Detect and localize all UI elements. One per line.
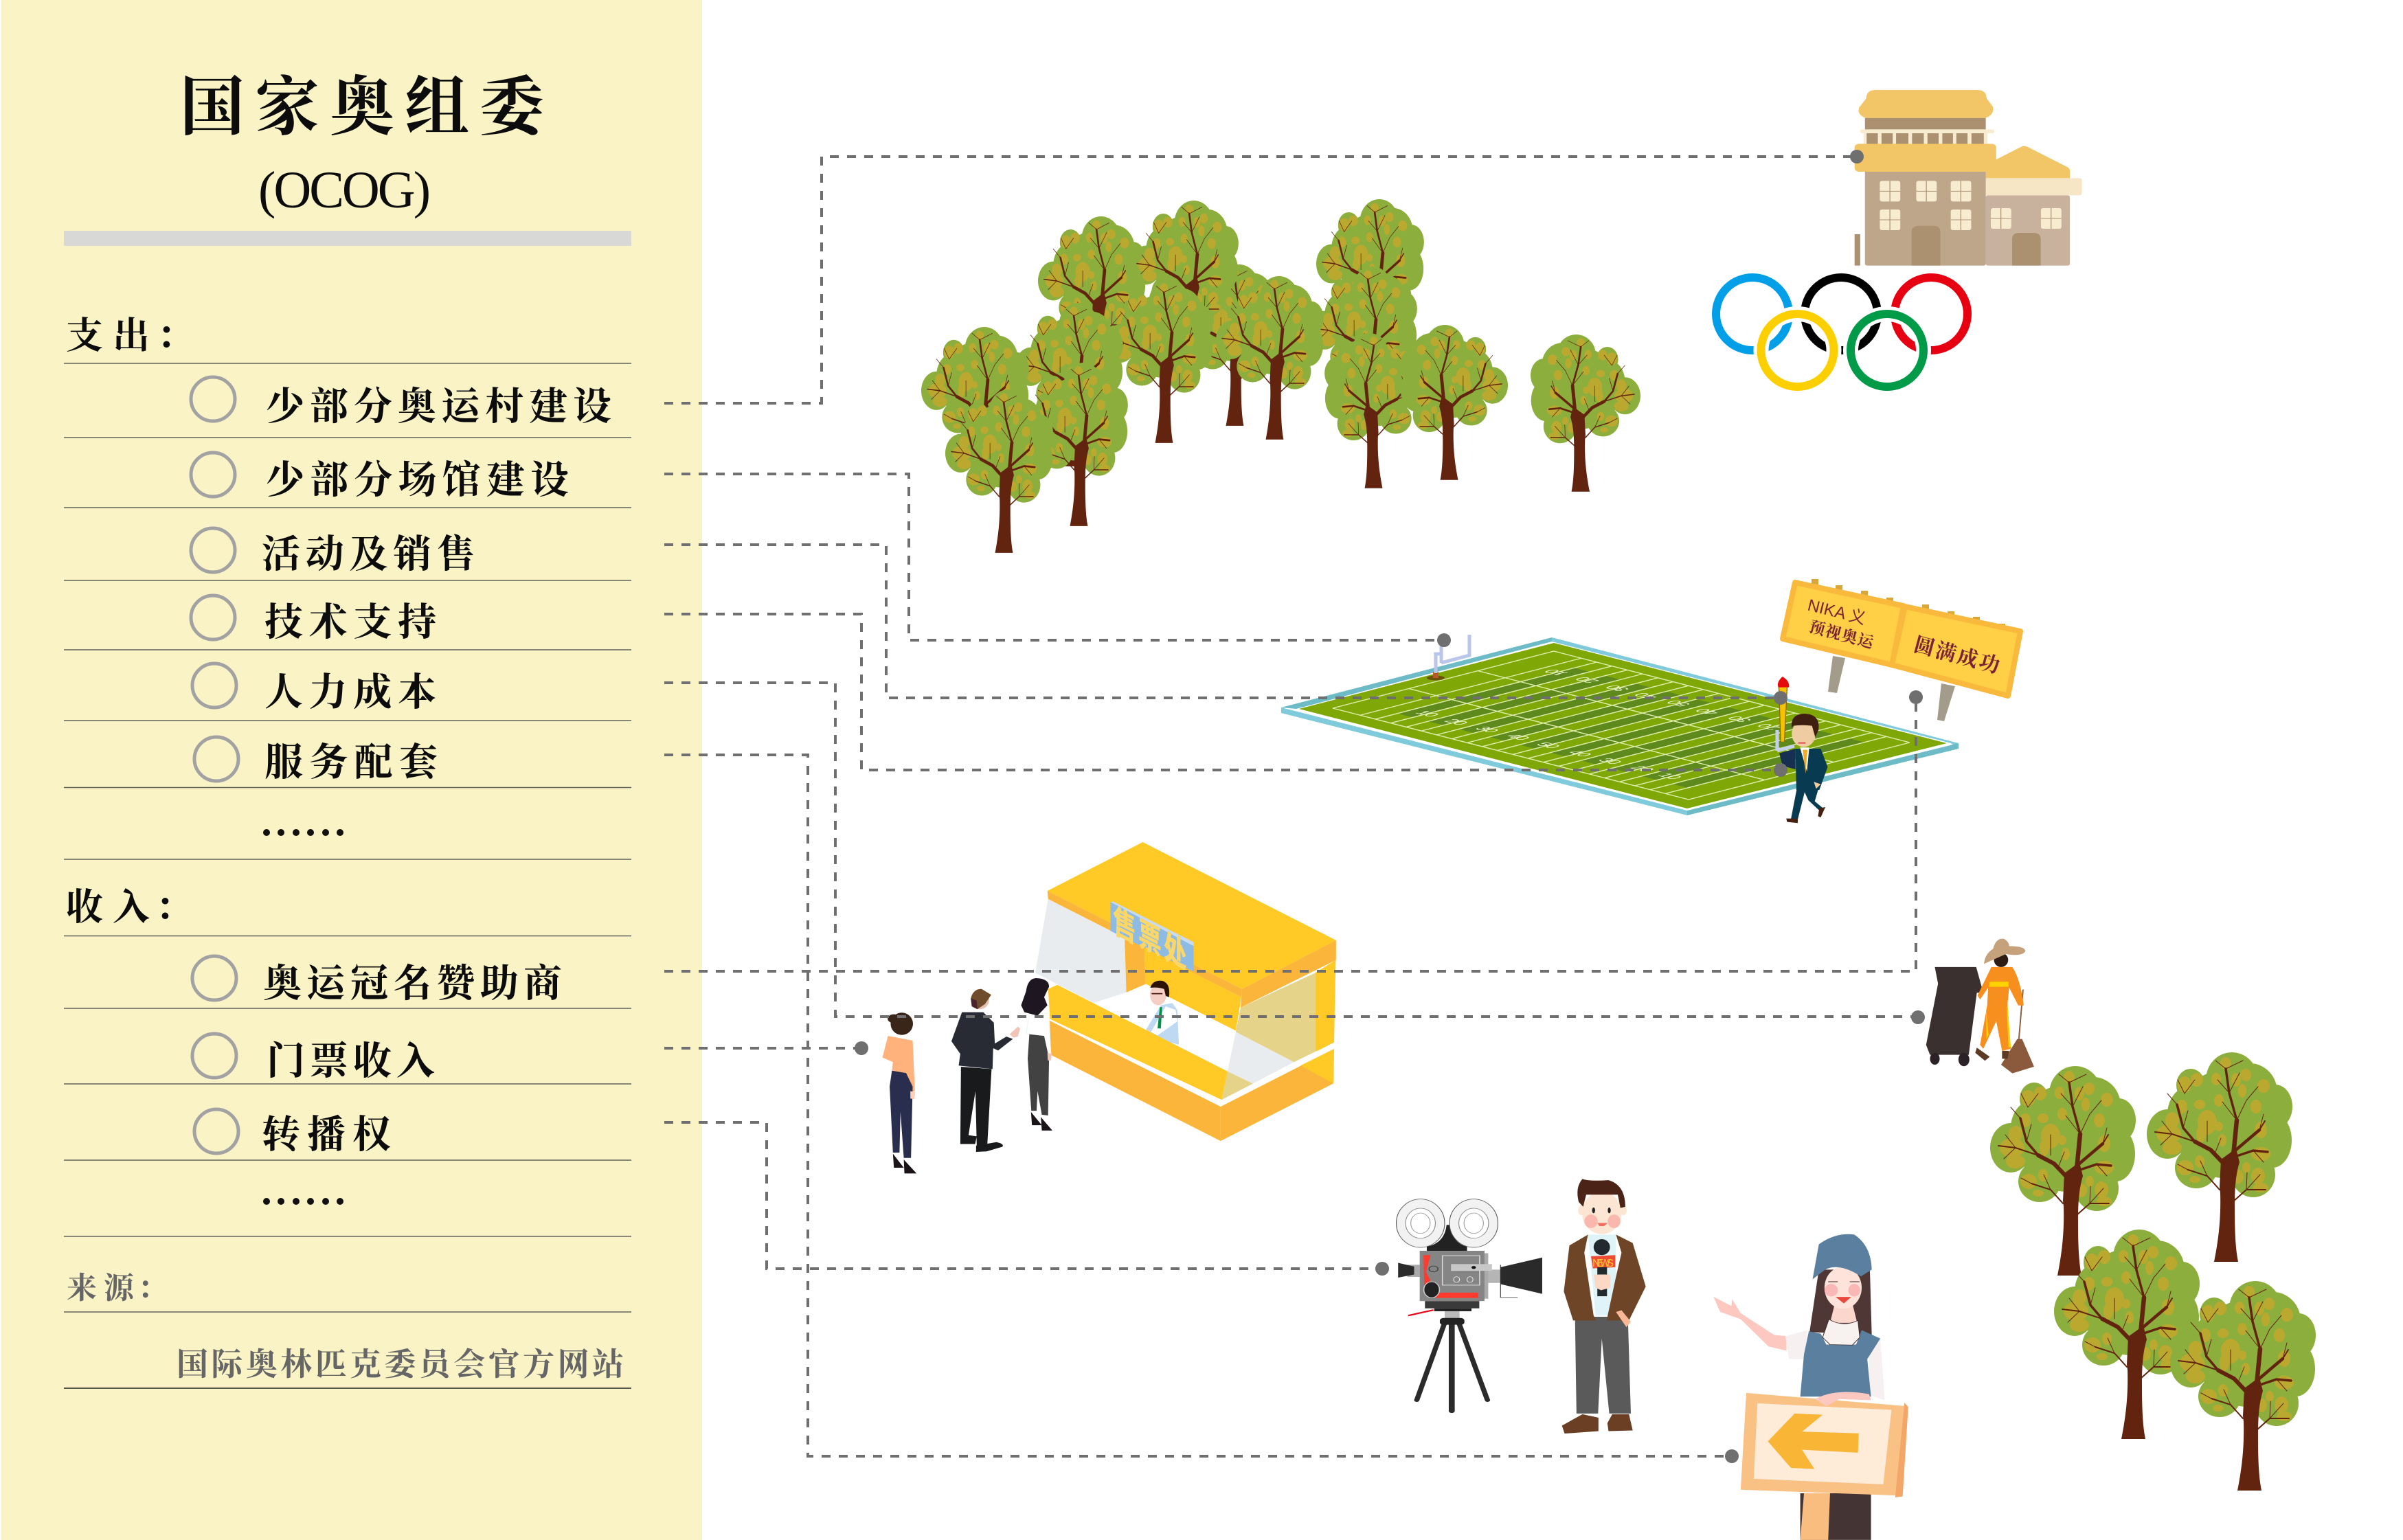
yard numbers upper: 50 [1662,699,1695,707]
pole and legs [1801,1493,1871,1540]
yard numbers lower: 30 [1471,725,1504,734]
ruled lines [64,363,631,1388]
neckline [1823,1320,1860,1345]
janitor with bin [1926,939,2034,1074]
lens [1485,1258,1542,1298]
cap [1812,1234,1872,1279]
yard numbers lower: 50 [1532,741,1565,749]
post left [1828,656,1845,693]
income items: 门票收入 [267,1041,435,1083]
torch bearer [1778,677,1827,823]
yard numbers lower: 20 [1626,765,1659,773]
goal post left [1427,635,1469,680]
connector end dots [855,150,1925,1463]
board one [1783,582,1904,665]
connector: broadcast rights [664,1122,1377,1269]
woman with arrow sign [1713,1234,1908,1540]
film reels [1397,1199,1498,1247]
yard numbers upper: 40 [1691,707,1724,716]
board text NIKA: NIKA 义 [1806,596,1868,629]
connectors [664,157,1916,1456]
tripod [1417,1311,1487,1411]
yard numbers lower: 20 [1440,718,1473,726]
worker [1975,939,2025,1061]
heading: expenditure: 支出： [66,315,194,356]
arm [1713,1297,1787,1350]
camera on tripod [1397,1199,1542,1411]
yard numbers lower: 10 [1411,710,1444,718]
sign board [1741,1393,1908,1496]
clerk [1138,981,1179,1045]
subtitle OCOG: (OCOG) [258,161,431,219]
shirt [1588,1234,1616,1315]
hair [1577,1179,1625,1208]
yard numbers upper [1539,668,1785,731]
olympic rings [1716,278,1967,387]
field turf [1299,643,1947,808]
connector: sponsors [664,704,1916,971]
expenditure items: 服务配套 [264,742,438,784]
expenditure items: 人力成本 [264,672,436,714]
building: olympic village [1855,90,2082,266]
broom [2001,990,2034,1074]
board slogan two: 圆满成功 [1911,633,2002,678]
connector: village construction [664,157,1851,403]
connector: service [664,755,1726,1456]
title divider bar [64,231,631,246]
man in suit [951,989,1020,1152]
ellipsis dots 2 [263,1198,343,1205]
income items: 转播权 [262,1114,391,1157]
connector: ticket income [664,1047,856,1050]
board two [1892,607,2020,696]
heading: income: 收入： [66,887,192,928]
yard numbers upper: 20 [1570,676,1603,684]
field lines and stripes [1333,651,1910,800]
camera body [1420,1251,1492,1311]
torch [1778,677,1789,742]
panel background [1,0,702,1540]
yard numbers lower: 10 [1654,772,1686,780]
camera top connector [1427,1225,1467,1251]
hair back [1809,1269,1872,1335]
football field [1281,635,1959,815]
neck and head [1582,1192,1621,1234]
title: 国家奥组委 [180,72,546,144]
jacket [1564,1234,1646,1320]
expenditure items: 少部分奥运村建设 [266,386,611,429]
source label: 来源： [67,1271,168,1305]
expenditure items: 活动及销售 [262,534,475,576]
connector: technical support [664,614,1776,770]
face [1825,1267,1862,1309]
yard numbers upper: 20 [1752,723,1785,731]
ticket booth [883,842,1336,1173]
yard numbers lower: 40 [1564,749,1597,758]
woman left [883,1012,916,1173]
goal post right [1777,730,1794,751]
yard numbers lower: 40 [1502,733,1535,741]
income items [262,963,562,1157]
field border [1281,637,1552,709]
dress [1801,1330,1880,1396]
NEWS flag text: NEWS [1592,1258,1614,1269]
expenditure items: 技术支持 [264,602,436,644]
connector: venue construction [664,474,1439,640]
connector: activities and sales [664,545,1776,698]
left panel [1,0,702,1540]
yard numbers upper: 40 [1629,692,1662,700]
trash bin [1926,967,1983,1066]
arrow [1768,1414,1859,1469]
post right [1937,683,1955,721]
expenditure items [262,386,611,784]
reporter [1562,1179,1646,1434]
yard numbers lower [1411,710,1686,780]
yard numbers lower: 30 [1594,757,1627,765]
lamps [1812,579,2005,631]
income items: 奥运冠名赞助商 [263,963,562,1006]
board slogan one: 预视奥运 [1807,618,1877,652]
hand in pocket [1616,1311,1631,1327]
connector: labour cost [664,683,1913,1017]
main body [1865,170,1986,266]
microphone [1591,1239,1615,1296]
billboards [1783,579,2020,721]
booth sign text: 售票处 [1113,903,1187,976]
forest lower [1990,1052,2316,1491]
yard numbers upper: 30 [1601,684,1634,692]
sleeves [1785,1330,1885,1400]
source text: 国际奥林匹克委员会官方网站 [177,1347,624,1382]
neck [1830,1304,1858,1323]
trousers [1575,1317,1631,1414]
shoes [1562,1414,1633,1434]
eyepiece [1398,1263,1420,1278]
right wing [1985,146,2082,266]
forest upper [921,199,1640,553]
sign plate [1111,901,1194,972]
expenditure items: 少部分场馆建设 [266,460,569,502]
woman right [1021,978,1052,1131]
yard numbers upper: 30 [1723,715,1756,723]
yard numbers upper: 10 [1539,668,1572,677]
hands [1815,1392,1871,1406]
bullet circles [191,377,238,1153]
ellipsis dots 1 [263,829,343,836]
